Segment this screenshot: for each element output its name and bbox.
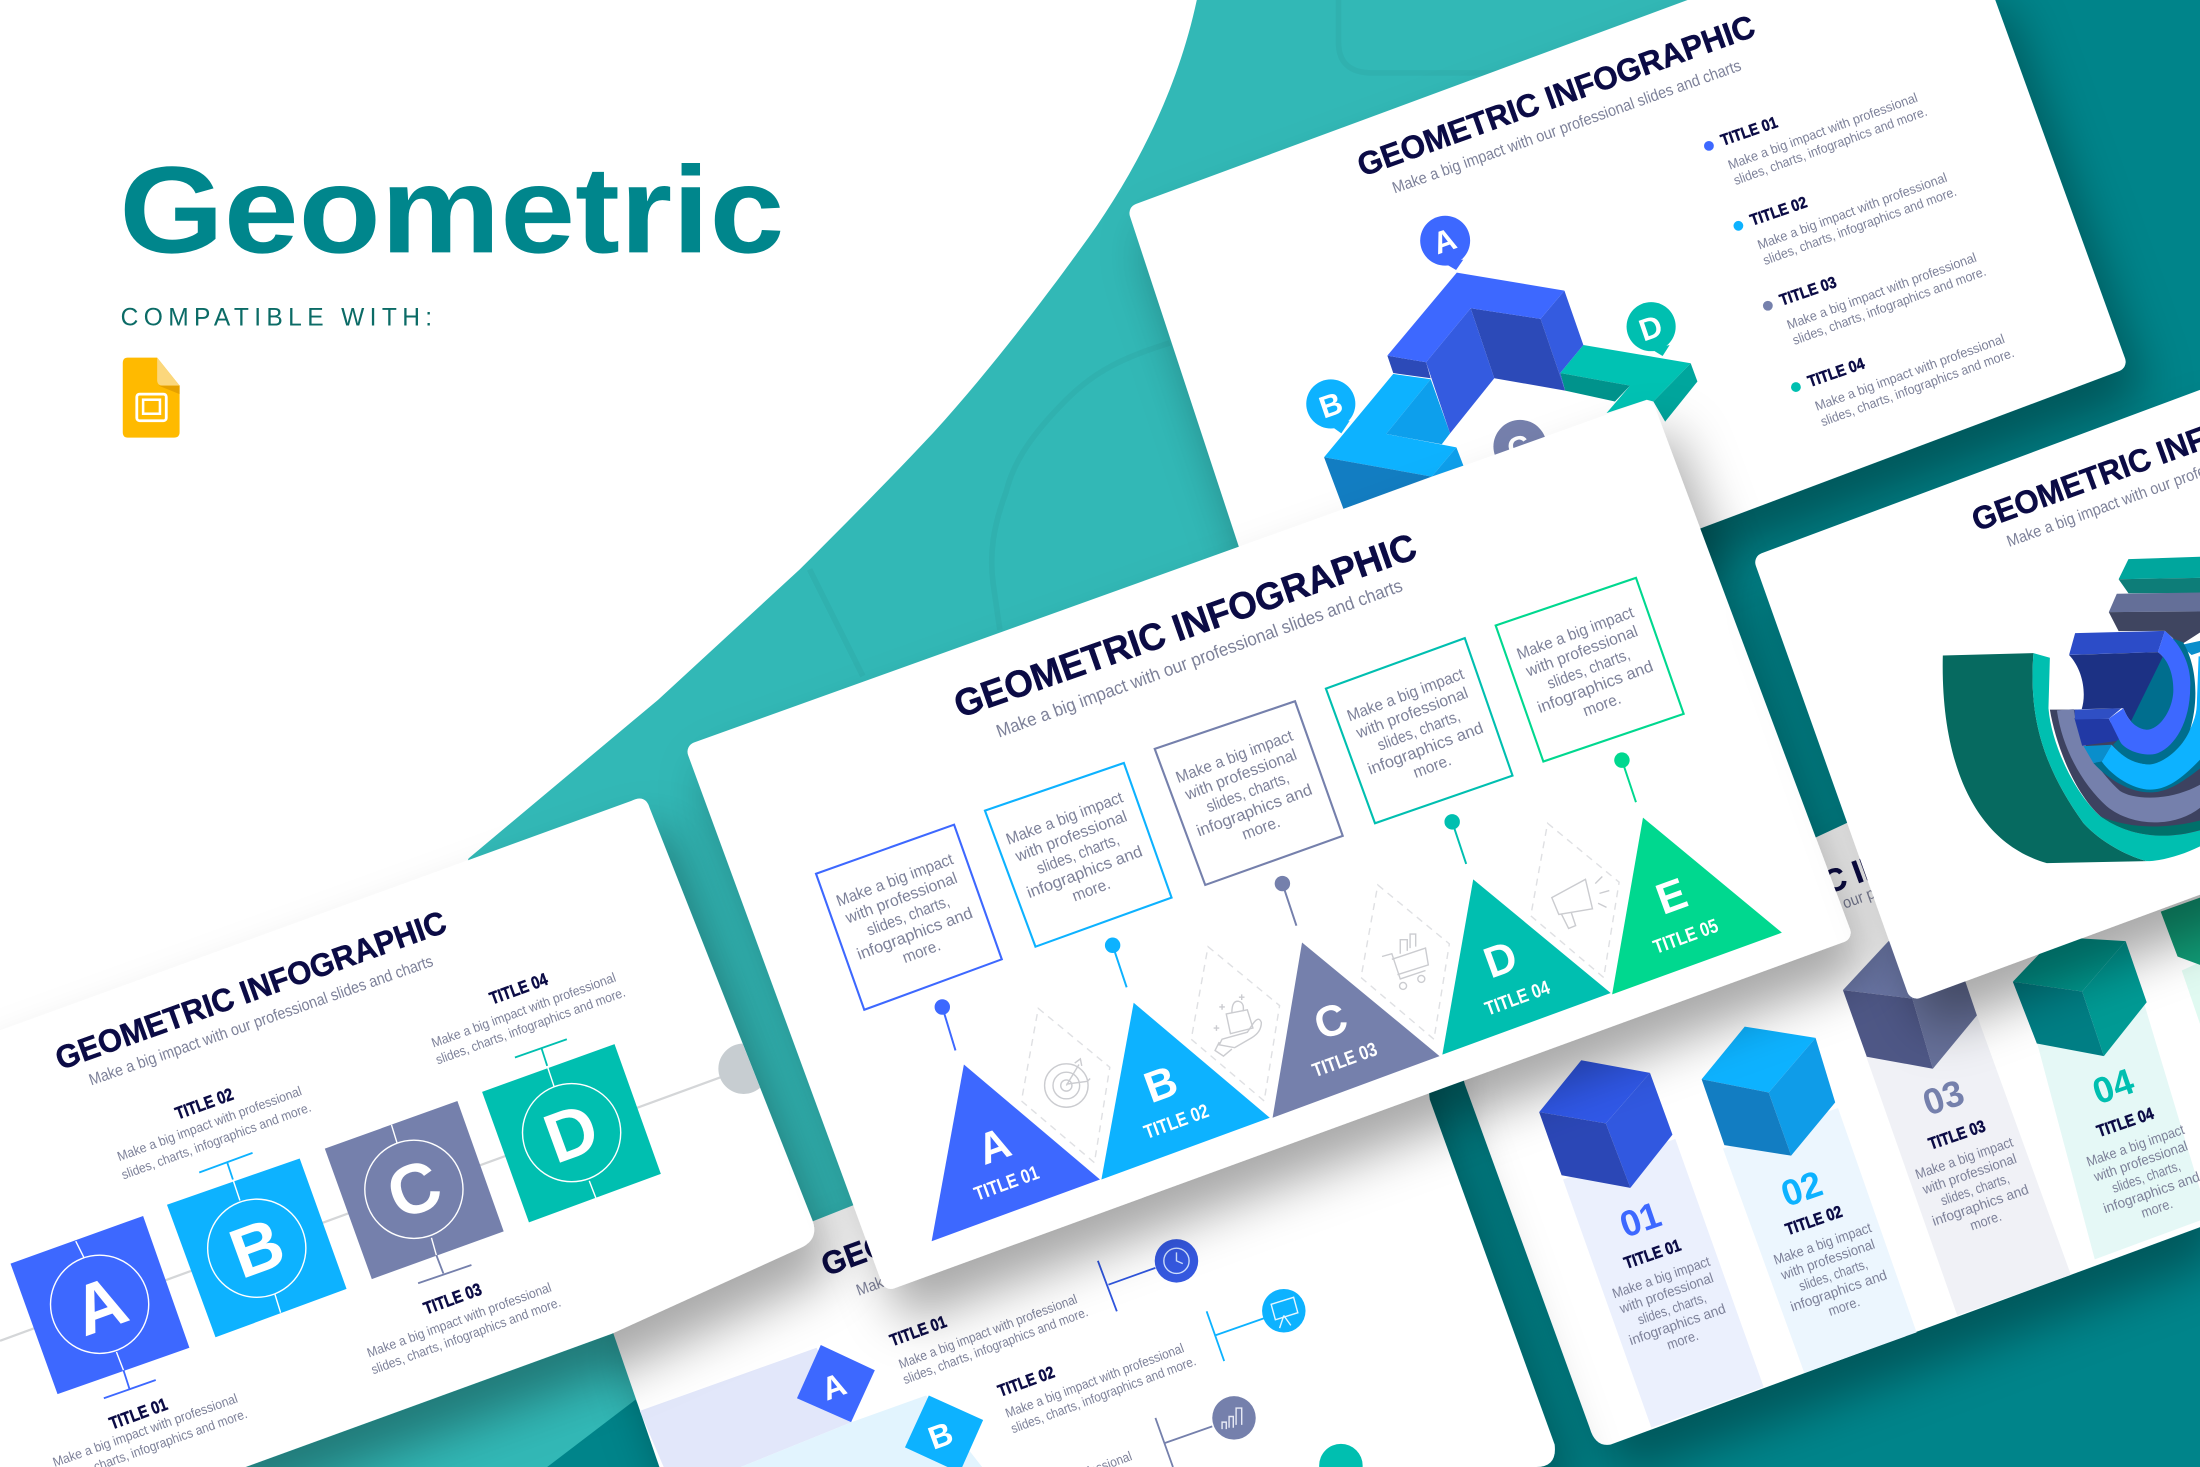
pin D <box>1444 814 1466 864</box>
column 01: infographics and <box>1627 1300 1728 1348</box>
slide subtitle: Make a big impact with our professional slides and charts <box>87 952 435 1089</box>
column 03: Make a big impact <box>1913 1134 2015 1182</box>
slide subtitle: Make a big impact with our professional slides and charts <box>854 1157 1207 1300</box>
list text 01: slides, charts, infographics and more. <box>901 1304 1090 1387</box>
text box C: Make a big impact <box>1173 727 1296 787</box>
triangle C: C <box>1308 994 1354 1050</box>
bubble B: B <box>1315 385 1347 425</box>
column 02: Make a big impact <box>1771 1219 1873 1268</box>
bubble C: C <box>1503 427 1535 467</box>
column 02 <box>1702 1027 1917 1373</box>
square B: B <box>220 1203 294 1293</box>
text box E <box>1496 578 1684 762</box>
dark edge of inner ring <box>2113 638 2195 764</box>
square A <box>11 1216 189 1398</box>
column 01: with professional <box>1616 1269 1715 1317</box>
text box B: Make a big impact <box>1004 788 1126 849</box>
text box E: slides, charts, <box>1545 646 1633 693</box>
text box B: more. <box>1070 875 1113 905</box>
slide title: GEOMETRIC INFOGRAPHIC <box>816 1108 1218 1283</box>
triangle C <box>1273 942 1440 1118</box>
pale band B <box>741 1395 982 1467</box>
column 01: TITLE 01 <box>1621 1236 1683 1273</box>
diamond A <box>797 1345 875 1422</box>
column 03: more. <box>1968 1208 2003 1233</box>
background: dark teal area <box>1424 0 2200 1467</box>
square D <box>482 1039 661 1222</box>
compatible with label: COMPATIBLE WITH: <box>121 304 432 331</box>
triangle A: TITLE 01 <box>971 1162 1042 1206</box>
list text 01: TITLE 01 <box>887 1312 949 1350</box>
square B <box>167 1153 347 1337</box>
text box B: infographics and <box>1024 842 1145 902</box>
text box C: slides, charts, <box>1204 769 1292 816</box>
label block 03: slides, charts, infographics and more. <box>369 1295 563 1377</box>
text box B <box>985 763 1172 947</box>
icon: hand with bag <box>1214 994 1261 1056</box>
list item 03: TITLE 03 <box>1777 273 1839 310</box>
text box D: Make a big impact <box>1345 665 1467 725</box>
column 03: 03 <box>1918 1072 1969 1124</box>
bright blue inner ring <box>2109 631 2190 755</box>
triangle B: TITLE 02 <box>1141 1100 1212 1144</box>
list item 04: Make a big impact with professional <box>1813 331 2007 414</box>
light blue ring <box>2102 656 2200 790</box>
column 01 <box>1539 1060 1764 1428</box>
diamond B <box>905 1395 983 1467</box>
column 03: TITLE 03 <box>1926 1116 1988 1154</box>
connector line and end node <box>0 1043 769 1341</box>
slide: bottom centre list <box>603 982 1555 1467</box>
isometric shape <box>1324 273 1697 509</box>
square A: A <box>63 1260 137 1351</box>
label block 03: Make a big impact with professional <box>365 1280 553 1360</box>
list text 02: slides, charts, infographics and more. <box>1009 1353 1198 1436</box>
bubble C <box>1493 420 1547 473</box>
slide: left squares chart <box>0 798 814 1467</box>
triangle A: A <box>971 1119 1017 1175</box>
column 04: 04 <box>2087 1060 2140 1112</box>
text box D: infographics and <box>1365 719 1486 779</box>
list text 01: Make a big impact with professional <box>897 1291 1079 1372</box>
icon: megaphone <box>1552 877 1609 928</box>
text box A: Make a big impact <box>834 850 956 910</box>
column 04: more. <box>2139 1195 2175 1221</box>
dark inner band <box>2093 743 2200 792</box>
triangle E: TITLE 05 <box>1650 915 1721 959</box>
label block 02: Make a big impact with professional <box>115 1083 304 1164</box>
column 01: Make a big impact <box>1610 1253 1712 1301</box>
text box E: more. <box>1580 690 1624 720</box>
label block 04: TITLE 04 <box>487 969 550 1008</box>
text box A: infographics and <box>855 904 975 964</box>
background: dark teal triangle bottom <box>547 1400 666 1467</box>
navy ring <box>2050 710 2200 836</box>
column 02: with professional <box>1778 1236 1877 1283</box>
triangle E: E <box>1650 870 1694 925</box>
list item 03: Make a big impact with professional <box>1785 250 1978 332</box>
icon: shopping cart <box>1382 934 1428 989</box>
text box D: with professional <box>1353 684 1471 742</box>
label block 02: slides, charts, infographics and more. <box>119 1100 313 1182</box>
text box B: slides, charts, <box>1034 831 1122 878</box>
text box A: slides, charts, <box>864 892 952 940</box>
bubble A <box>1420 216 1470 270</box>
triangle A <box>932 1064 1100 1241</box>
column 04: TITLE 04 <box>2094 1104 2157 1141</box>
grey ring <box>2057 709 2200 822</box>
pin 04 <box>1319 1444 1363 1467</box>
stacked teal bar <box>2119 557 2200 579</box>
label block 02: TITLE 02 <box>172 1084 236 1123</box>
square D: D <box>534 1088 608 1178</box>
outer dark green wall <box>1943 653 2147 863</box>
pin 02 board <box>1207 1289 1306 1361</box>
upper blue block <box>2069 631 2165 655</box>
label block 04: Make a big impact with professional <box>429 970 618 1050</box>
pin A <box>935 999 955 1050</box>
column 04: slides, charts, <box>2110 1157 2182 1196</box>
text box C <box>1155 701 1343 885</box>
slide: bottom right cube columns <box>1445 701 2200 1445</box>
pin 01 clock <box>1098 1239 1198 1311</box>
column 04: with professional <box>2091 1137 2190 1185</box>
text box E: with professional <box>1523 622 1640 681</box>
column 03 <box>1843 941 2071 1316</box>
column 02: infographics and <box>1788 1266 1889 1314</box>
column 02: TITLE 02 <box>1783 1202 1845 1239</box>
text box D: slides, charts, <box>1375 707 1463 755</box>
column 01: 01 <box>1614 1194 1666 1246</box>
column 02: slides, charts, <box>1797 1256 1870 1294</box>
triangle E <box>1612 818 1782 994</box>
dashed diamonds <box>1021 823 1619 1163</box>
diamond A: A <box>817 1366 851 1407</box>
square C: C <box>377 1144 451 1235</box>
slide title: GEOMETRIC INFOGRAPHIC <box>949 526 1422 727</box>
stacked grey bar <box>2109 593 2200 612</box>
bubble D <box>1627 302 1676 356</box>
slide title: GEOMETRIC INFOGRAPHIC <box>1663 782 2064 957</box>
icon: google slides <box>123 358 180 438</box>
text box A <box>816 825 1002 1010</box>
slide: right concentric rings <box>1765 363 2200 989</box>
column 02: 02 <box>1776 1163 1828 1215</box>
list item 02: slides, charts, infographics and more. <box>1761 184 1959 268</box>
column 04: Make a big impact <box>2084 1121 2186 1170</box>
slide: centre triangles chart <box>697 411 1841 1279</box>
pin C <box>1275 876 1296 926</box>
list item 02: Make a big impact with professional <box>1755 170 1949 252</box>
slide subtitle: Make a big impact with our professional slides and charts <box>1390 57 1744 197</box>
list item 01: slides, charts, infographics and more. <box>1731 104 1929 188</box>
text box B: with professional <box>1012 807 1130 866</box>
pin E <box>1614 752 1636 802</box>
column 01: more. <box>1665 1327 1700 1353</box>
list item 04: TITLE 04 <box>1805 355 1867 391</box>
bubble B <box>1306 379 1355 433</box>
slide subtitle: Make a big impact with our professional slides and charts <box>993 574 1405 741</box>
column 03: infographics and <box>1930 1181 2031 1229</box>
list text 02: TITLE 02 <box>995 1363 1057 1401</box>
slide subtitle: Make a big impact with our professional slides and charts <box>1697 821 2050 964</box>
diamond B: B <box>923 1415 958 1457</box>
triangle D: TITLE 04 <box>1482 977 1553 1020</box>
lower blue block <box>2074 718 2120 746</box>
pin 03 bars <box>1155 1396 1256 1467</box>
list item 02: TITLE 02 <box>1748 193 1809 230</box>
text box D: more. <box>1411 751 1454 782</box>
text box C: infographics and <box>1194 781 1315 840</box>
label block 01: TITLE 01 <box>106 1394 170 1433</box>
column 03: slides, charts, <box>1938 1170 2011 1208</box>
title: Geometric <box>119 141 784 279</box>
text box D <box>1326 638 1512 823</box>
column 03: with professional <box>1920 1150 2018 1197</box>
text box A: more. <box>900 936 943 967</box>
text box A: with professional <box>842 869 960 928</box>
list item 01: Make a big impact with professional <box>1726 90 1920 173</box>
pin B <box>1105 938 1127 987</box>
text box E: Make a big impact <box>1514 603 1637 663</box>
bubble A: A <box>1428 221 1461 261</box>
slide title: GEOMETRIC INFOGRAPHIC <box>51 904 451 1077</box>
label block 04: slides, charts, infographics and more. <box>434 985 627 1067</box>
slide: top right isometric chart <box>1139 0 2116 694</box>
triangle D: D <box>1478 932 1524 988</box>
slide title: GEOMETRIC INFOGRAPHIC <box>1353 8 1760 183</box>
label block 03: TITLE 03 <box>421 1279 485 1318</box>
list text 02: Make a big impact with professional <box>1003 1340 1186 1421</box>
text box C: more. <box>1240 813 1283 844</box>
text box C: with professional <box>1182 746 1299 804</box>
3D rings <box>1943 557 2200 863</box>
bubble D: D <box>1635 308 1667 348</box>
triangle B <box>1101 1003 1270 1179</box>
list item 01: TITLE 01 <box>1718 113 1780 150</box>
column 04 <box>2013 937 2200 1259</box>
triangle D <box>1442 879 1611 1055</box>
triangle B: B <box>1138 1057 1184 1113</box>
icon: target <box>1045 1059 1090 1107</box>
list item 04: slides, charts, infographics and more. <box>1818 345 2016 429</box>
column 05 cube fragment <box>2161 898 2200 1024</box>
pale band A <box>640 1348 852 1467</box>
column 01: slides, charts, <box>1635 1289 1708 1328</box>
square C <box>325 1101 504 1283</box>
list item 03: slides, charts, infographics and more. <box>1790 264 1988 348</box>
text box E: infographics and <box>1535 657 1656 717</box>
column 02: more. <box>1826 1293 1862 1319</box>
triangle C: TITLE 03 <box>1309 1038 1380 1082</box>
teal ring <box>2033 653 2200 861</box>
